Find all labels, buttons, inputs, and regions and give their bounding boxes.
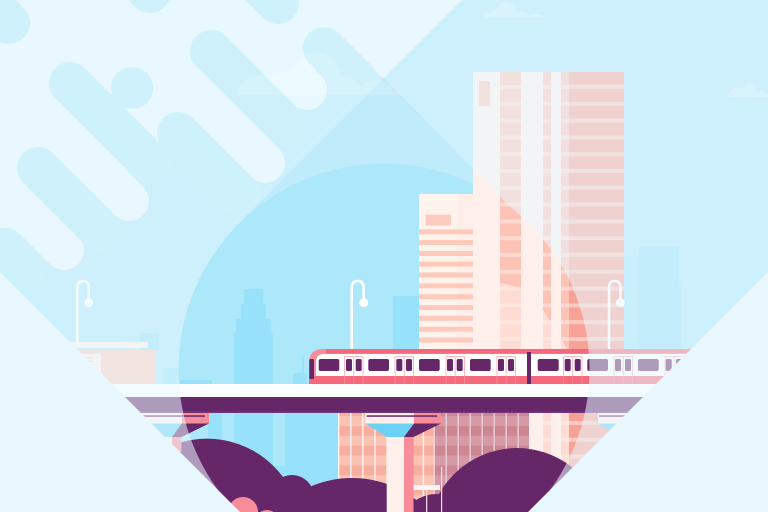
train roof stripe	[326, 349, 768, 354]
light area	[0, 0, 462, 234]
large circle	[178, 164, 589, 512]
train windows	[309, 359, 682, 379]
tree canopies	[115, 439, 602, 512]
central pier	[365, 413, 441, 512]
tall tower	[473, 72, 624, 512]
faint building beside the tower	[624, 256, 639, 349]
train door lower lines	[344, 376, 684, 384]
train body	[309, 349, 768, 384]
foreground triangle: bottom right	[528, 272, 768, 512]
pink tree blobs	[228, 497, 274, 512]
cloud: right	[727, 83, 768, 97]
bridge deck	[0, 384, 768, 413]
foreground triangle: bottom left	[0, 272, 240, 512]
left low building	[40, 342, 156, 384]
top-left light area with diagonal pills	[0, 0, 462, 272]
light stripes	[36, 70, 327, 270]
thin masts	[427, 467, 442, 512]
train door frames	[344, 356, 684, 376]
train white band	[316, 354, 768, 376]
mid building with stripes	[419, 194, 473, 349]
train lower stripe	[309, 376, 768, 384]
train coupler	[527, 352, 531, 384]
cloud: left	[237, 52, 402, 95]
far skyline	[140, 246, 681, 512]
blue pills	[0, 0, 360, 269]
diamond tint behind the circle	[245, 78, 525, 300]
cloud: top	[484, 2, 545, 18]
right pier	[598, 413, 674, 437]
lamp posts	[77, 281, 624, 349]
front building under the bridge	[338, 413, 530, 512]
train	[309, 349, 768, 384]
left pier	[133, 413, 209, 512]
